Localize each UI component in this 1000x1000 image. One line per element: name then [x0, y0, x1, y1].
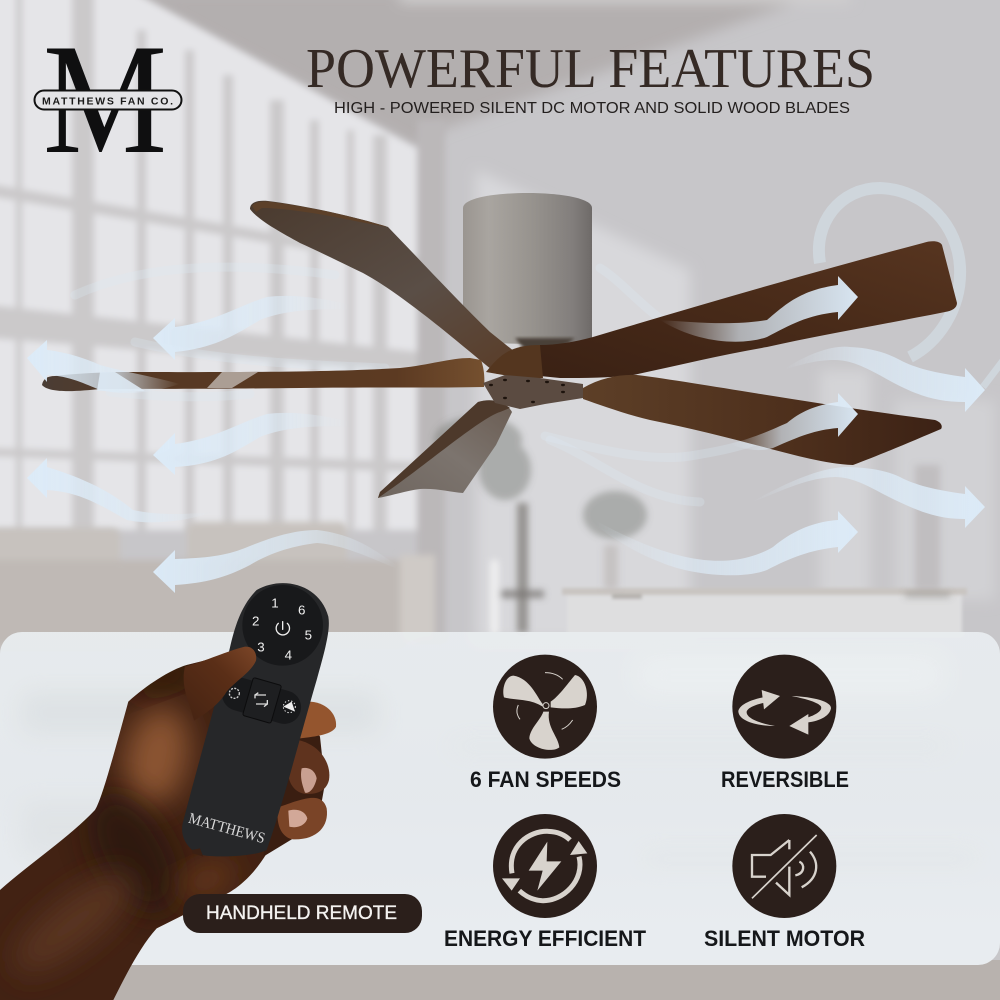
arrow: lower right — [595, 511, 858, 575]
label: silent motor: SILENT MOTOR — [704, 926, 865, 951]
remote bottom notch — [192, 848, 203, 857]
remote control body: 5 — [305, 627, 312, 642]
panel: features — [0, 632, 1000, 965]
subtitle: HIGH - POWERED SILENT DC MOTOR AND SOLID WOOD BLADES — [334, 100, 850, 117]
handheld remote label — [183, 894, 422, 933]
arrow: far left upper — [27, 340, 180, 393]
ring finger — [278, 798, 327, 839]
faint airflow streaks — [75, 267, 755, 502]
remote control body: 3 — [257, 640, 265, 655]
title: POWERFUL FEATURES — [306, 38, 875, 100]
arrow: far right upper — [783, 347, 985, 412]
blade: upper right — [540, 241, 957, 378]
blade: lower right — [583, 375, 942, 465]
icon: fan speeds — [493, 655, 597, 759]
window panes — [0, 0, 445, 640]
arrow: far left lower — [27, 458, 213, 522]
label: 6 fan speeds: 6 FAN SPEEDS — [470, 767, 621, 792]
handheld remote label: HANDHELD REMOTE — [206, 903, 397, 924]
remote control body: 6 — [298, 602, 305, 617]
feature labels — [444, 767, 865, 951]
arrow: upper right — [660, 276, 858, 342]
hand shading — [14, 662, 238, 974]
blade: left — [42, 358, 484, 391]
arrow: middle left — [153, 413, 350, 475]
fan motor housing — [463, 193, 592, 350]
ceiling fan — [42, 193, 957, 498]
middle finger — [288, 740, 329, 794]
icon: reversible — [732, 655, 836, 759]
remote control body: 1 — [271, 595, 279, 610]
airflow arrows right — [595, 276, 985, 575]
remote control body — [182, 583, 329, 857]
icon: energy efficient — [493, 814, 597, 918]
arrow: lower left — [153, 530, 400, 593]
thumb — [184, 647, 256, 721]
arrow: upper left — [153, 296, 350, 360]
logo: MATTHEWS FAN CO. — [42, 96, 173, 108]
blade: upper left — [250, 201, 535, 374]
fan hub — [483, 345, 583, 409]
feature icons — [493, 655, 836, 918]
remote control body: 2 — [252, 614, 259, 629]
plants — [434, 416, 950, 635]
hand base — [0, 653, 300, 1000]
finger backing — [263, 703, 325, 857]
remote in hand — [0, 583, 336, 1000]
blade: bottom, grey — [378, 400, 512, 498]
label: reversible: REVERSIBLE — [721, 767, 849, 792]
ceiling and upper wall — [120, 0, 830, 150]
button row — [217, 670, 306, 730]
sofa — [0, 522, 435, 648]
arrow: far right lower — [750, 467, 985, 528]
airflow arrows left — [27, 296, 400, 593]
arrow: middle right — [730, 393, 858, 450]
logo: M — [43, 12, 167, 187]
hand and fingers — [0, 653, 336, 1000]
fingernails — [301, 768, 317, 793]
power icon — [276, 622, 289, 635]
remote brand text: MATTHEWS — [187, 810, 267, 847]
console table — [562, 588, 967, 635]
index finger — [300, 702, 336, 738]
remote control body: 4 — [285, 647, 293, 662]
airflow swirl — [819, 188, 1000, 387]
label: energy efficient: ENERGY EFFICIENT — [444, 926, 647, 951]
icon: silent motor — [732, 814, 836, 918]
